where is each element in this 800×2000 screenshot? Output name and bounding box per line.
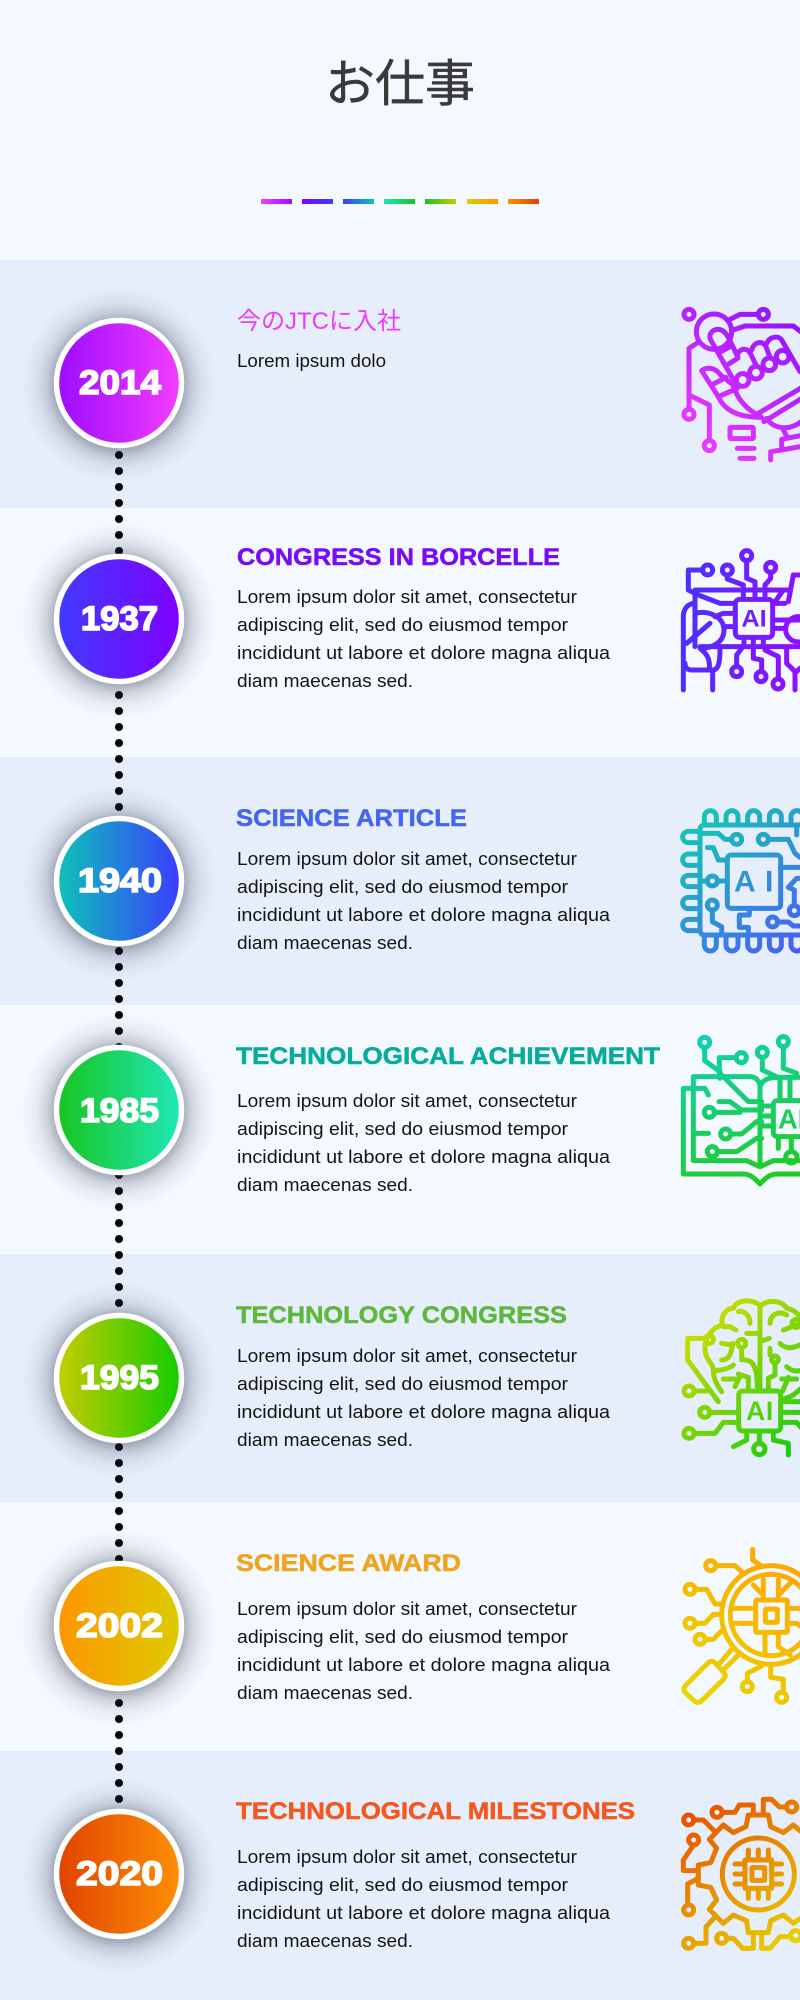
body: 2002 (237, 1599, 611, 1703)
body: 2002: Lorem ipsum dolor sit amet, consectetur (237, 1599, 577, 1619)
body: 1985: incididunt ut labore et dolore magna aliqua (237, 1147, 611, 1167)
body: 1937: diam maecenas sed. (237, 671, 413, 691)
body: 1995: diam maecenas sed. (237, 1430, 413, 1450)
rainbow dash divider (261, 199, 539, 204)
body: 1995: adipiscing elit, sed do eiusmod tempor (237, 1374, 568, 1394)
body: 1940: adipiscing elit, sed do eiusmod tempor (237, 877, 568, 897)
body: 2020 (237, 1847, 611, 1951)
body: 1985 (237, 1091, 611, 1195)
icon: AI brain (684, 1301, 800, 1455)
icon: magnifier over chip (684, 1549, 800, 1702)
body: 1995: Lorem ipsum dolor sit amet, consectetur (237, 1346, 577, 1366)
body: 2002: diam maecenas sed. (237, 1683, 413, 1703)
heading: 2014: 今のJTCに入社 (237, 308, 401, 335)
year marker: 1985: 1985 (80, 1092, 159, 1130)
heading: 2002: SCIENCE AWARD (236, 1550, 461, 1577)
year marker: 1985 (21, 1014, 217, 1210)
body: 1940 (237, 849, 611, 953)
heading: 1995: TECHNOLOGY CONGRESS (236, 1302, 567, 1329)
panel: 1937 (0, 508, 800, 757)
panel: 1995 (0, 1254, 800, 1502)
panel: 1940 (0, 757, 800, 1005)
body: 1985: adipiscing elit, sed do eiusmod tempor (237, 1119, 568, 1139)
body: 2020: adipiscing elit, sed do eiusmod tempor (237, 1875, 568, 1895)
icon text: AI: AI (746, 1396, 773, 1426)
year marker: 1937 (21, 523, 217, 719)
body: 2020: incididunt ut labore et dolore magna aliqua (237, 1903, 611, 1923)
year marker: 2020 (21, 1778, 217, 1974)
year marker: 1940 (21, 785, 217, 981)
panel: 1985 (0, 1005, 800, 1254)
icon text: AI: AI (734, 866, 773, 899)
body: 1985: diam maecenas sed. (237, 1175, 413, 1195)
year marker: 2014: 2014 (79, 364, 161, 402)
year marker: 2014 (21, 287, 217, 483)
heading: 1940: SCIENCE ARTICLE (236, 805, 467, 832)
body: 1995: incididunt ut labore et dolore magna aliqua (237, 1402, 611, 1422)
body: 2002: adipiscing elit, sed do eiusmod tempor (237, 1627, 568, 1647)
year marker: 1995: 1995 (80, 1359, 159, 1397)
year marker: 2020: 2020 (76, 1855, 163, 1893)
body: 1937: Lorem ipsum dolor sit amet, consectetur (237, 587, 577, 607)
body: 1937 (237, 587, 611, 691)
body: 2020: Lorem ipsum dolor sit amet, consectetur (237, 1847, 577, 1867)
body: 1940: incididunt ut labore et dolore magna aliqua (237, 905, 611, 925)
body: 1985: Lorem ipsum dolor sit amet, consectetur (237, 1091, 577, 1111)
icon: AI book (683, 1037, 800, 1184)
heading: 2020: TECHNOLOGICAL MILESTONES (236, 1798, 635, 1825)
title: お仕事 (325, 56, 475, 112)
year marker: 1995 (21, 1282, 217, 1478)
icon text: AI: AI (741, 606, 767, 633)
body: 2020: diam maecenas sed. (237, 1931, 413, 1951)
year marker: 2002: 2002 (76, 1607, 163, 1645)
body: 2014: Lorem ipsum dolo (237, 351, 386, 371)
panel: 2002 (0, 1502, 800, 1751)
heading: 1985: TECHNOLOGICAL ACHIEVEMENT (236, 1043, 660, 1070)
icon: gear with chip (683, 1799, 800, 1948)
panel: 2020 (0, 1751, 800, 2000)
icon: robot hand (684, 309, 800, 460)
body: 1940: Lorem ipsum dolor sit amet, consectetur (237, 849, 577, 869)
body: 1937: incididunt ut labore et dolore magna aliqua (237, 643, 611, 663)
icon: AI circuit board (683, 811, 800, 951)
body: 1940: diam maecenas sed. (237, 933, 413, 953)
year marker: 2002 (21, 1530, 217, 1726)
dotted timeline connector (115, 455, 123, 1800)
panel: 2014 (0, 260, 800, 508)
icon: AI chip and hand (683, 551, 800, 690)
heading: 1937: CONGRESS IN BORCELLE (237, 544, 560, 571)
body: 1995 (237, 1346, 611, 1450)
year marker: 1940: 1940 (78, 862, 162, 900)
year marker: 1937: 1937 (81, 600, 158, 638)
body: 2002: incididunt ut labore et dolore magna aliqua (237, 1655, 611, 1675)
body: 1937: adipiscing elit, sed do eiusmod tempor (237, 615, 568, 635)
